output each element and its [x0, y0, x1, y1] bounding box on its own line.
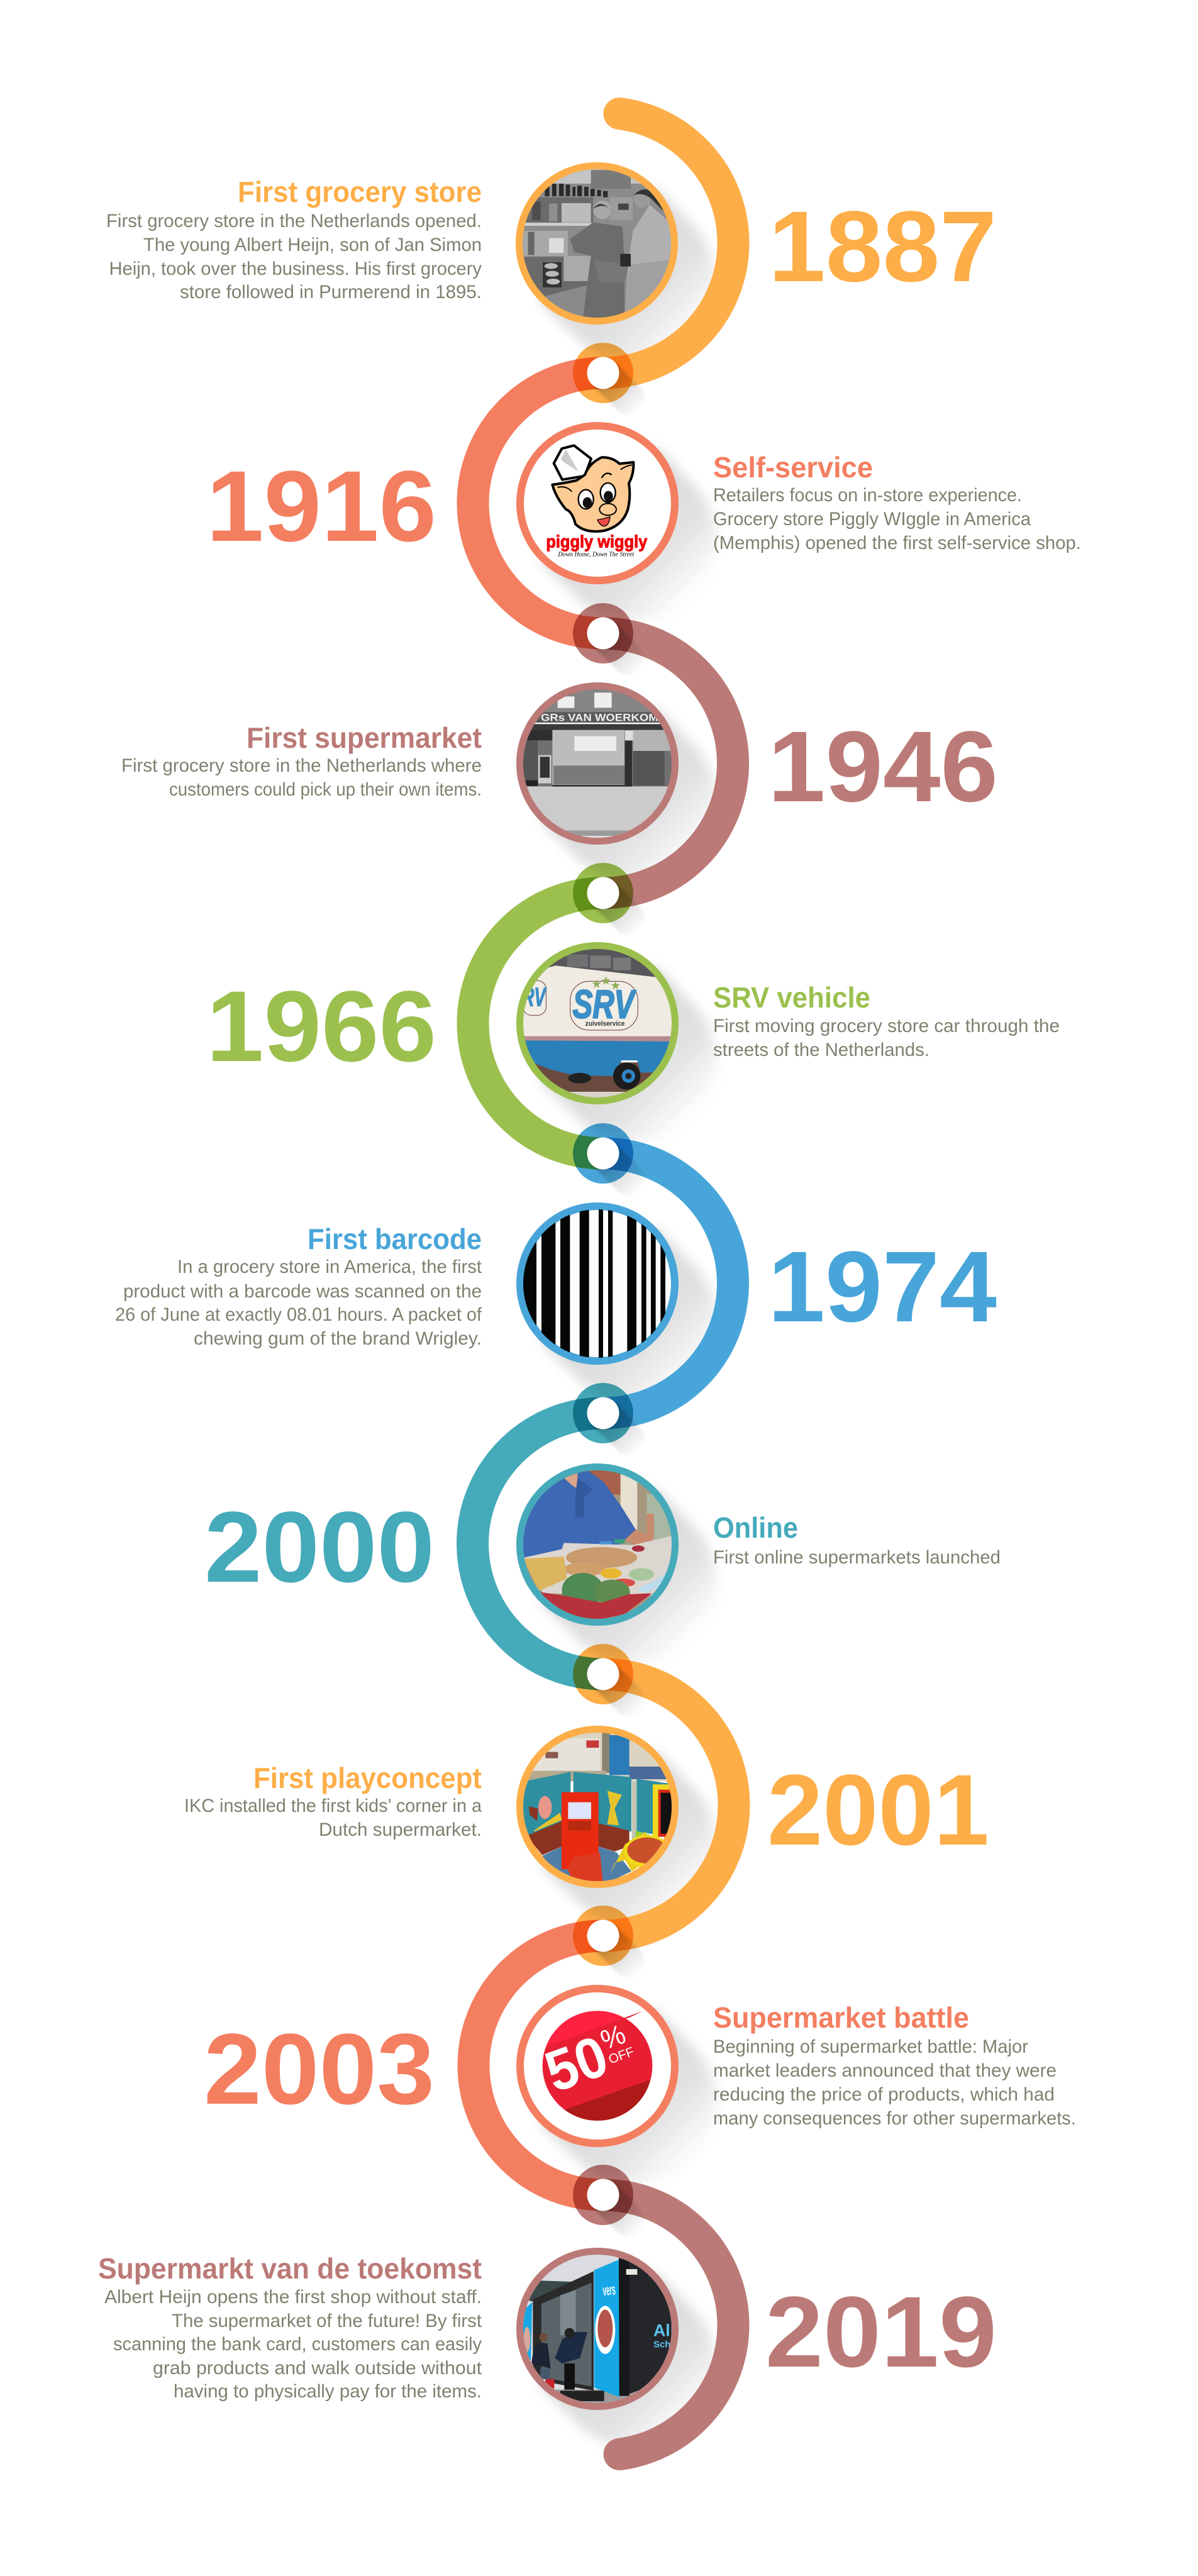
description: first supermarket: First grocery store in the Netherlands where — [121, 755, 482, 776]
description: first supermarket — [121, 755, 482, 800]
description: self-service — [713, 485, 1081, 553]
logo: piggly wiggly: Down Home, Down The Street — [557, 551, 635, 558]
photo: staffless shop container: vers — [602, 2281, 616, 2299]
photo: SRV van: ★ — [601, 974, 611, 988]
photo: kids corner — [520, 1729, 675, 1886]
description: first grocery store — [106, 211, 482, 303]
icon: barcode — [520, 1206, 675, 1361]
description: supermarket battle: reducing the price of products, which had — [713, 2084, 1055, 2105]
year 1887: 1887 — [768, 190, 997, 303]
description: first supermarket: customers could pick up their own items. — [169, 779, 482, 800]
description: supermarket battle: Beginning of supermarket battle: Major — [713, 2036, 1028, 2057]
heading: first barcode: First barcode — [308, 1223, 482, 1255]
photo: shop front — [520, 686, 675, 841]
infographic canvas — [99, 97, 1079, 2470]
year 1946: 1946 — [768, 710, 998, 823]
description: supermarkt van de toekomst — [104, 2287, 482, 2402]
photo: SRV van: RV — [522, 982, 546, 1011]
year 1966: 1966 — [206, 970, 436, 1082]
year 1974: 1974 — [768, 1230, 997, 1343]
description: supermarket battle: market leaders announced that they were — [713, 2060, 1057, 2081]
year 1916: 1916 — [206, 450, 436, 562]
description: first playconcept: IKC installed the first kids’ corner in a — [184, 1796, 482, 1816]
year 2001: 2001 — [767, 1753, 989, 1866]
description: supermarkt van de toekomst: Albert Heijn opens the first shop without staff. — [104, 2287, 482, 2307]
description: first barcode: product with a barcode was scanned on the — [123, 1281, 482, 1302]
heading: supermarket battle: Supermarket battle — [713, 2001, 969, 2034]
description: first playconcept: Dutch supermarket. — [319, 1819, 482, 1840]
description: self-service: Retailers focus on in-store experience. — [713, 485, 1022, 506]
description: self-service: Grocery store Piggly WIggle in America — [713, 509, 1031, 530]
panel: 1974 first barcode — [115, 1206, 997, 1361]
panel: 2001 first playconcept — [184, 1729, 989, 1886]
photo: staffless shop container — [520, 2251, 680, 2406]
photo: SRV van: ★ — [610, 979, 621, 993]
description: SRV vehicle — [713, 1016, 1060, 1060]
icon: 50% off sticker: % — [597, 2019, 630, 2056]
panel: 2000 online — [204, 1467, 1001, 1624]
panel: 2019 supermarkt van de toekomst — [98, 2251, 997, 2406]
description: first grocery store: First grocery store in the Netherlands opened. — [106, 211, 482, 231]
photo: staffless shop container: Schi — [653, 2339, 674, 2350]
description: first playconcept — [184, 1796, 482, 1840]
description: first grocery store: Heijn, took over the business. His first grocery — [109, 258, 482, 279]
year 2003: 2003 — [204, 2012, 435, 2125]
logo: piggly wiggly: piggly wiggly — [546, 532, 648, 552]
heading: SRV vehicle: SRV vehicle — [713, 981, 870, 1014]
photo: SRV van — [520, 945, 675, 1101]
photo long shadows — [540, 186, 750, 2482]
panel: 1966 SRV vehicle — [206, 945, 1060, 1101]
year 2019: 2019 — [765, 2275, 997, 2388]
icon: 50% off sticker: 50 — [537, 2023, 616, 2104]
description: first barcode: In a grocery store in America, the first — [177, 1257, 482, 1277]
photo: grocery delivery — [511, 1467, 675, 1624]
panel: 1887 first grocery store — [106, 166, 997, 321]
icon: 50% off sticker — [520, 1989, 675, 2143]
heading: self-service: Self-service — [713, 451, 873, 484]
description: first barcode — [115, 1257, 482, 1349]
heading: first supermarket: First supermarket — [247, 721, 482, 754]
year 2000: 2000 — [204, 1491, 435, 1603]
heading: supermarkt van de toekomst: Supermarkt van de toekomst — [98, 2252, 482, 2285]
timeline connector nodes — [573, 343, 652, 2243]
description: first barcode: 26 of June at exactly 08.01 hours. A packet of — [115, 1304, 482, 1325]
description: supermarket battle — [713, 2036, 1076, 2129]
description: supermarket battle: many consequences for other supermarkets. — [713, 2108, 1076, 2129]
description: online: First online supermarkets launched — [713, 1547, 1001, 1568]
description: first grocery store: The young Albert Heijn, son of Jan Simon — [143, 235, 482, 255]
heading: first playconcept: First playconcept — [253, 1762, 482, 1794]
photo: staffless shop container: Alb — [653, 2321, 680, 2340]
description: self-service: (Memphis) opened the first self-service shop. — [713, 533, 1081, 553]
description: SRV vehicle: streets of the Netherlands. — [713, 1040, 929, 1060]
panel: 1946 first supermarket — [121, 686, 998, 841]
photo: grocery shop interior — [519, 166, 675, 321]
description: first grocery store: store followed in Purmerend in 1895. — [180, 282, 482, 303]
photo: shop front: GRs VAN WOERKOM — [541, 712, 658, 724]
logo: piggly wiggly — [520, 426, 675, 580]
photo: SRV van: ★ — [591, 977, 602, 991]
description: SRV vehicle: First moving grocery store car through the — [713, 1016, 1060, 1036]
timeline curve arcs — [473, 114, 734, 2454]
description: supermarkt van de toekomst: grab products and walk outside without — [153, 2358, 482, 2379]
photo: SRV van: SRV — [573, 983, 636, 1027]
panel: 2003 supermarket battle — [204, 1989, 1076, 2143]
description: supermarkt van de toekomst: having to physically pay for the items. — [174, 2381, 482, 2402]
panel: 1916 self-service — [206, 426, 1081, 580]
heading: first grocery store: First grocery store — [238, 175, 482, 208]
photo: SRV van: zuivelservice — [585, 1020, 624, 1028]
description: first barcode: chewing gum of the brand Wrigley. — [194, 1328, 482, 1349]
heading: online: Online — [713, 1511, 798, 1544]
description: supermarkt van de toekomst: The supermarket of the future! By first — [172, 2311, 482, 2331]
icon: 50% off sticker: OFF — [607, 2045, 636, 2067]
description: supermarkt van de toekomst: scanning the bank card, customers can easily — [113, 2334, 482, 2355]
